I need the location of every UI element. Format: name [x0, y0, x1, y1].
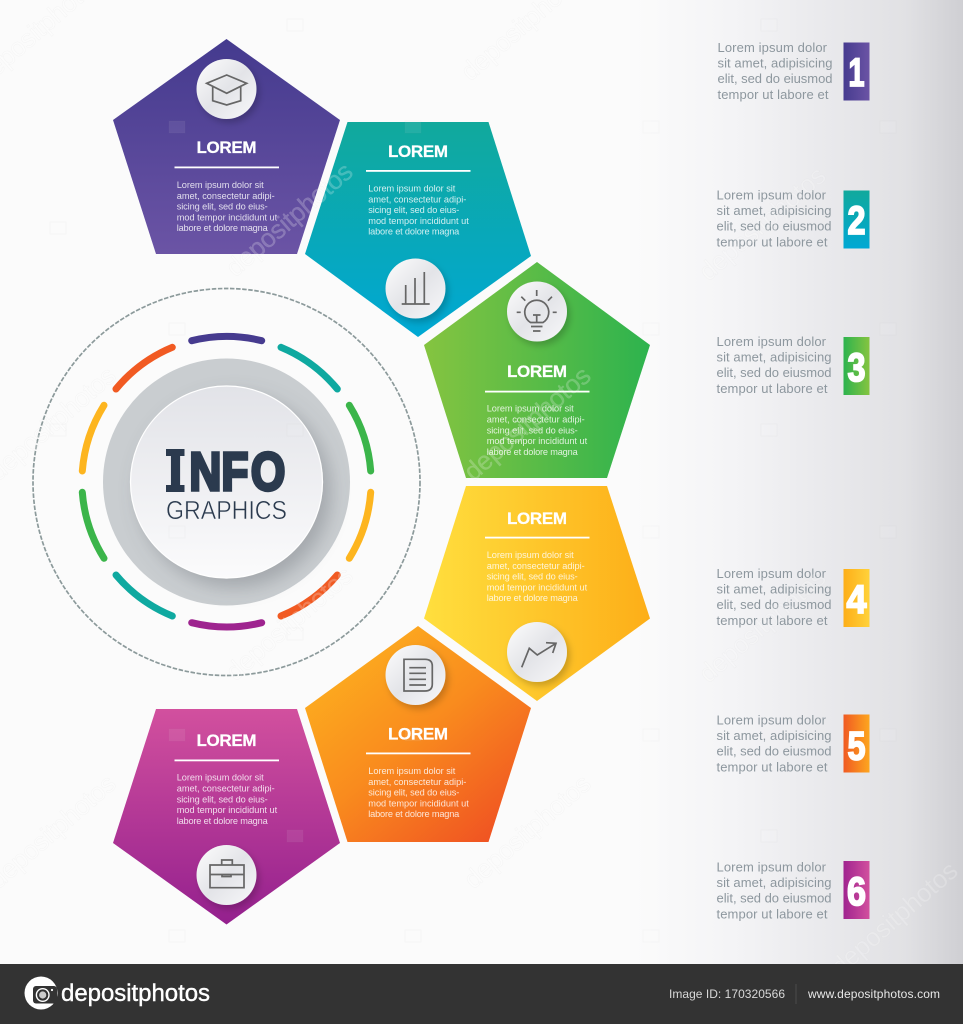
- body text 1: labore et dolore magna: [177, 223, 269, 233]
- body text 5: [368, 766, 469, 819]
- legend item 5: 5: [848, 724, 866, 768]
- body text 2: mod tempor incididunt ut: [368, 216, 469, 226]
- body text 1: amet, consectetur adipi-: [177, 191, 275, 201]
- legend item 4: elit, sed do eiusmod: [716, 597, 832, 612]
- body text 6: [177, 773, 278, 826]
- centre subtitle: GRAPHICS: GRAPHICS: [166, 495, 287, 525]
- body text 4: Lorem ipsum dolor sit: [487, 550, 574, 560]
- heading 6: LOREM: [196, 731, 256, 750]
- watermarks: depositphotos: [220, 156, 359, 282]
- heading 3: LOREM: [507, 362, 567, 381]
- body text 4: sicing elit, sed do eius-: [487, 572, 578, 582]
- body text 3: amet, consectetur adipi-: [487, 414, 585, 424]
- icon: graduation cap: [196, 59, 256, 119]
- footer logo icon: [24, 976, 58, 1010]
- body text 4: [487, 550, 588, 603]
- legend item 6: elit, sed do eiusmod: [716, 891, 832, 906]
- footer bar: [0, 964, 963, 1024]
- body text 3: Lorem ipsum dolor sit: [487, 404, 574, 414]
- panel: pentagon 6 magenta: [113, 709, 340, 924]
- heading 2: LOREM: [388, 142, 448, 161]
- icon: trend arrow: [507, 622, 567, 682]
- legend item 3: Lorem ipsum dolor: [716, 334, 827, 349]
- legend item 1: Lorem ipsum dolor: [718, 40, 828, 55]
- legend item 2: 2: [848, 199, 866, 243]
- legend item 2: Lorem ipsum dolor: [716, 188, 827, 202]
- heading 5: LOREM: [388, 724, 448, 743]
- legend item 3: 3: [848, 346, 866, 390]
- body text 6: labore et dolore magna: [177, 816, 269, 826]
- legend item 4: sit amet, adipisicing: [716, 582, 832, 597]
- body text 5: amet, consectetur adipi-: [368, 777, 466, 787]
- body text 2: amet, consectetur adipi-: [368, 194, 466, 204]
- legend item 3: sit amet, adipisicing: [716, 350, 832, 365]
- panel: pentagon 4 yellow: [424, 486, 650, 701]
- body text 4: mod tempor incididunt ut: [487, 582, 588, 592]
- legend item 2: [716, 188, 870, 249]
- body text 3: sicing elit, sed do eius-: [487, 425, 578, 435]
- legend item 6: sit amet, adipisicing: [716, 875, 832, 890]
- body text 6: amet, consectetur adipi-: [177, 784, 275, 794]
- legend item 4: [716, 566, 870, 628]
- legend item 2: tempor ut labore et: [716, 234, 828, 249]
- legend item 3: tempor ut labore et: [716, 381, 828, 396]
- body text 3: mod tempor incididunt ut: [487, 436, 588, 446]
- legend item 6: tempor ut labore et: [716, 906, 828, 921]
- icon: briefcase: [196, 845, 256, 905]
- segmented colour ring: [82, 336, 371, 627]
- body text 5: sicing elit, sed do eius-: [368, 788, 459, 798]
- body text 6: Lorem ipsum dolor sit: [177, 773, 264, 783]
- watermarks: depositphotos: [693, 160, 832, 286]
- body text 3: labore et dolore magna: [487, 447, 579, 457]
- legend item 6: Lorem ipsum dolor: [716, 860, 827, 874]
- body text 2: sicing elit, sed do eius-: [368, 205, 459, 215]
- body text 4: amet, consectetur adipi-: [487, 561, 585, 571]
- footer image id: Image ID: 170320566: [669, 987, 785, 1001]
- legend item 5: [716, 712, 870, 774]
- body text 5: Lorem ipsum dolor sit: [368, 766, 456, 776]
- watermarks: depositphotos: [693, 562, 832, 688]
- legend item 5: elit, sed do eiusmod: [716, 744, 832, 759]
- body text 3: [487, 404, 588, 457]
- body text 1: [177, 180, 278, 233]
- centre title: INFO: INFO: [169, 442, 285, 502]
- legend item 6: [716, 860, 870, 921]
- heading 4: LOREM: [507, 509, 567, 528]
- legend item 5: sit amet, adipisicing: [716, 728, 832, 743]
- legend item 5: tempor ut labore et: [716, 759, 828, 774]
- body text 5: labore et dolore magna: [368, 809, 460, 819]
- body text 1: sicing elit, sed do eius-: [177, 202, 268, 212]
- icon: bar chart: [386, 258, 446, 318]
- body text 6: sicing elit, sed do eius-: [177, 794, 268, 804]
- body text 2: Lorem ipsum dolor sit: [368, 184, 456, 194]
- body text 1: Lorem ipsum dolor sit: [177, 180, 264, 190]
- legend item 4: 4: [846, 578, 867, 622]
- legend item 1: sit amet, adipisicing: [718, 56, 832, 71]
- legend item 2: elit, sed do eiusmod: [716, 219, 832, 234]
- panel: pentagon 5 orange: [305, 626, 531, 842]
- body text 1: mod tempor incididunt ut: [177, 212, 278, 222]
- panel: pentagon 1 purple: [113, 39, 340, 254]
- watermarks: depositphotos: [458, 768, 597, 894]
- legend item 1: tempor ut labore et: [718, 87, 829, 102]
- body text 4: labore et dolore magna: [487, 593, 579, 603]
- legend item 2: sit amet, adipisicing: [716, 203, 832, 218]
- watermarks: depositphotos: [825, 855, 963, 981]
- watermarks: depositphotos: [220, 560, 359, 686]
- legend item 1: elit, sed do eiusmod: [718, 71, 832, 86]
- centre disc: [103, 358, 350, 606]
- footer logo wordmark: depositphotos: [61, 980, 210, 1007]
- body text 6: mod tempor incididunt ut: [177, 805, 278, 815]
- legend item 4: tempor ut labore et: [716, 613, 828, 628]
- panel: pentagon 2 teal: [305, 122, 531, 337]
- legend item 5: Lorem ipsum dolor: [716, 712, 827, 728]
- dashed outer ring: [33, 288, 420, 676]
- legend item 6: 6: [847, 870, 866, 914]
- legend item 4: Lorem ipsum dolor: [716, 566, 827, 581]
- legend item 3: elit, sed do eiusmod: [716, 365, 832, 380]
- icon: light bulb: [507, 282, 567, 342]
- icon: document: [386, 645, 446, 705]
- body text 2: [368, 184, 469, 237]
- watermarks: depositphotos: [458, 360, 597, 486]
- legend item 1: 1: [848, 51, 864, 95]
- heading 1: LOREM: [196, 138, 256, 157]
- watermark camera marks: [50, 19, 896, 942]
- panel: pentagon 3 green: [424, 262, 650, 478]
- footer url: www.depositphotos.com: [807, 987, 940, 1001]
- body text 5: mod tempor incididunt ut: [368, 798, 469, 808]
- legend item 1: [718, 40, 870, 102]
- legend item 3: [716, 334, 870, 396]
- body text 2: labore et dolore magna: [368, 227, 460, 237]
